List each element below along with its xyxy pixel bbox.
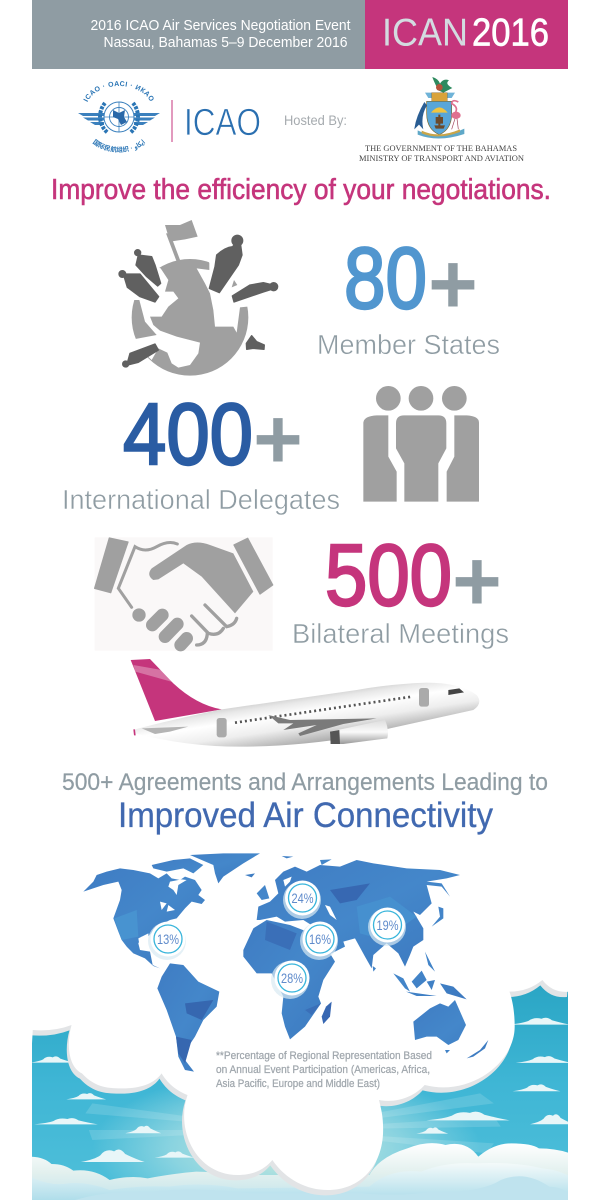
icon: handshake (95, 537, 273, 651)
callout: 13%: 13% (157, 931, 179, 947)
Bahamas ministry caption: THE GOVERNMENT OF THE BAHAMAS (365, 143, 517, 153)
map footnote: on Annual Event Participation (Americas, Africa, (216, 1064, 430, 1076)
stat: 400+ international delegates: International Delegates (62, 484, 340, 515)
callout: 16%: 16% (309, 931, 331, 947)
stat: 400+ international delegates (62, 386, 340, 515)
callout: 19%: 19% (376, 917, 398, 933)
map footnote: Asia Pacific, Europe and Middle East) (216, 1078, 380, 1090)
panel: white cloud (32, 970, 568, 1196)
ICAO emblem: 国际民航组织 · ايكاو (92, 138, 146, 152)
stat: 80+ member states: + (428, 237, 478, 332)
hosted by label: Hosted By: (284, 112, 347, 128)
Africa (243, 920, 335, 1039)
engine (330, 720, 388, 744)
ICAO wordmark: ICAO (184, 102, 261, 144)
South America (157, 963, 219, 1072)
section heading: Improved Air Connectivity (118, 796, 493, 835)
fuselage (135, 683, 479, 747)
European and Arctic islands (257, 856, 332, 900)
flag (165, 220, 198, 262)
windows (235, 697, 412, 723)
Eurasia (257, 860, 460, 968)
callout: 16% (300, 922, 338, 960)
callout: 28% (271, 960, 310, 999)
event details text: Nassau, Bahamas 5–9 December 2016 (104, 35, 348, 51)
callout: 13% (148, 922, 186, 960)
Bahamas ministry caption (359, 143, 524, 163)
map footnote: **Percentage of Regional Representation Based (216, 1050, 432, 1062)
stat: 400+ international delegates: + (253, 392, 303, 487)
small clouds (30, 1018, 574, 1162)
ICAN2016 wordmark (382, 12, 549, 54)
Australia and New Zealand (413, 1000, 488, 1058)
section subheading: 500+ Agreements and Arrangements Leading to (62, 769, 548, 796)
callout: 19% (368, 908, 406, 946)
globe (110, 243, 277, 376)
panel: sky background (30, 970, 574, 1200)
world map (83, 853, 488, 1072)
Bahamas ministry caption: MINISTRY OF TRANSPORT AND AVIATION (359, 153, 524, 163)
stat: 80+ member states (317, 230, 500, 360)
event details text (90, 18, 350, 51)
map: Europe, Africa, Asia, Oceania (243, 856, 488, 1058)
event details text: 2016 ICAO Air Services Negotiation Event (90, 18, 350, 34)
icon: globe with figures (110, 220, 278, 376)
North America (83, 868, 205, 968)
map footnote (216, 1050, 432, 1090)
ICAO emblem: ICAO · OACI · ИКАО (83, 81, 154, 102)
ICAN2016 wordmark: ICAN (382, 12, 468, 54)
figures (119, 235, 278, 367)
stat: 500+ bilateral meetings: 500 (325, 527, 452, 624)
stat: 500+ bilateral meetings (292, 527, 509, 649)
callout: 24% (283, 880, 321, 919)
stat: 400+ international delegates: 400 (123, 386, 253, 483)
icon: three people (363, 386, 479, 502)
sky glow and rays (102, 1090, 470, 1178)
stat: 80+ member states: Member States (317, 329, 500, 360)
Arctic islands and Greenland (152, 853, 260, 883)
ICAO logo divider (172, 100, 173, 142)
wing (268, 715, 377, 736)
ICAN2016 wordmark: 2016 (472, 12, 549, 54)
stat: 500+ bilateral meetings: + (452, 534, 502, 629)
stat: 500+ bilateral meetings: Bilateral Meetings (292, 618, 509, 649)
ICAO emblem (78, 81, 160, 152)
callout: 28%: 28% (281, 970, 303, 986)
Asia Pacific islands (373, 907, 467, 999)
callout: 24%: 24% (292, 890, 314, 906)
stat: 80+ member states: 80 (344, 230, 427, 327)
cloud bank (32, 1143, 568, 1190)
tail fin (131, 659, 222, 721)
icon: airplane (131, 659, 479, 747)
map: Americas (83, 853, 260, 1072)
main heading: Improve the efficiency of your negotiations. (51, 174, 551, 206)
icon: Bahamas coat of arms (414, 77, 464, 139)
header banner (32, 0, 568, 69)
